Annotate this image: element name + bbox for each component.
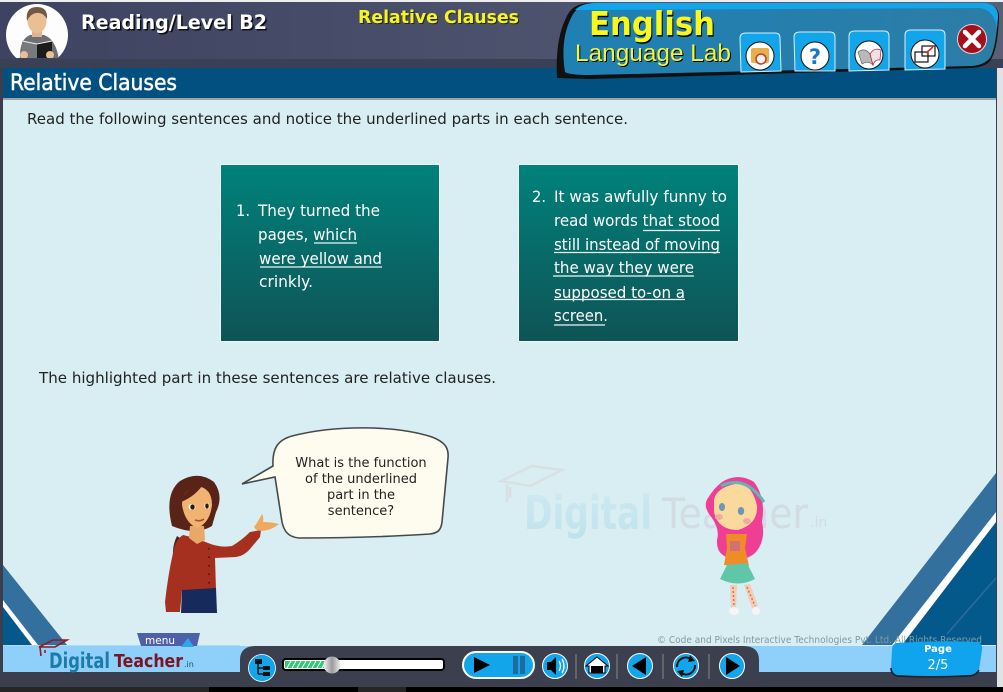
page badge: Page — [924, 644, 952, 655]
content panel — [3, 100, 996, 646]
icon: sound — [542, 654, 568, 678]
tab: window — [905, 30, 945, 70]
tab: help — [794, 32, 835, 71]
logo: Digital Teacher — [39, 640, 194, 673]
lab panel — [557, 3, 999, 79]
heading: level: Reading/Level B2 — [82, 12, 268, 36]
card: sentence 1: 1. — [236, 201, 250, 220]
title: English: English — [590, 6, 716, 44]
card: sentence 1: were yellow and — [259, 249, 382, 268]
title: Language Lab: Language Lab — [576, 41, 732, 68]
summary text: The highlighted part in these sentences are relative clauses. — [38, 369, 496, 387]
section title bar — [3, 68, 996, 100]
card: sentence 2: It was awfully funny to — [554, 187, 727, 206]
icon: replay — [674, 654, 698, 678]
heading: topic: Relative Clauses — [359, 9, 520, 29]
watermark logo: .in — [810, 515, 827, 531]
bubble text: sentence? — [328, 504, 394, 519]
logo: Digital Teacher: .in — [184, 660, 194, 669]
card: sentence 2: read words that stood — [554, 211, 720, 230]
copyright: © Code and Pixels Interactive Technologies Pvt. Ltd. All Rights Reserved — [657, 635, 982, 646]
card: sentence 2: still instead of moving — [554, 235, 720, 254]
instruction text: Read the following sentences and notice the underlined parts in each sentence. — [27, 110, 628, 128]
card: sentence 2 — [518, 164, 738, 342]
card: sentence 1 — [220, 164, 440, 342]
menu tab — [137, 633, 200, 647]
tab: history — [740, 33, 781, 72]
heading: level: Reading/Level B2 — [81, 11, 267, 34]
logo: Digital Teacher: Digital — [49, 649, 110, 673]
logo: Digital Teacher: Teacher — [114, 651, 183, 672]
tab: book — [849, 31, 889, 71]
bubble text: of the underlined — [305, 472, 417, 487]
corner decoration: left — [3, 565, 67, 645]
corner decoration: right — [862, 473, 996, 645]
icon: next — [720, 654, 744, 678]
tab: help: ? — [809, 45, 821, 69]
icon: previous — [628, 654, 652, 678]
bubble text — [295, 456, 427, 519]
character: girl — [706, 477, 764, 615]
title: English: English — [589, 4, 715, 43]
card: sentence 1: crinkly. — [259, 272, 313, 291]
card: sentence 1: They turned the — [257, 201, 380, 220]
section title: Relative Clauses — [10, 71, 177, 96]
control bar — [240, 646, 759, 687]
icon: reader avatar — [6, 4, 68, 58]
bubble text: part in the — [327, 488, 395, 503]
title: Language Lab: Language Lab — [575, 40, 731, 67]
bottom strip — [3, 645, 996, 672]
heading: topic: Relative Clauses — [358, 8, 519, 28]
bubble text: What is the function — [295, 456, 427, 471]
icon: menu tree — [248, 654, 276, 682]
speech bubble — [242, 428, 448, 538]
card: sentence 2: 2. — [532, 187, 546, 206]
page badge: 2/5 — [928, 658, 948, 673]
character: teacher — [165, 476, 279, 613]
icon: close — [958, 24, 986, 54]
header bar — [0, 2, 1003, 68]
progress slider — [283, 656, 444, 674]
card: sentence 2: screen. — [554, 306, 608, 325]
menu tab: menu — [145, 635, 175, 647]
icon: home — [584, 654, 610, 678]
card: sentence 2: the way they were — [554, 258, 694, 277]
card: sentence 2: supposed to-on a — [554, 283, 685, 302]
card: sentence 1: pages, which — [258, 225, 357, 244]
watermark logo — [501, 466, 827, 540]
watermark logo: Digital — [524, 486, 652, 540]
play and pause control — [463, 652, 534, 678]
watermark logo: Teacher — [661, 489, 809, 538]
page badge — [891, 641, 982, 677]
